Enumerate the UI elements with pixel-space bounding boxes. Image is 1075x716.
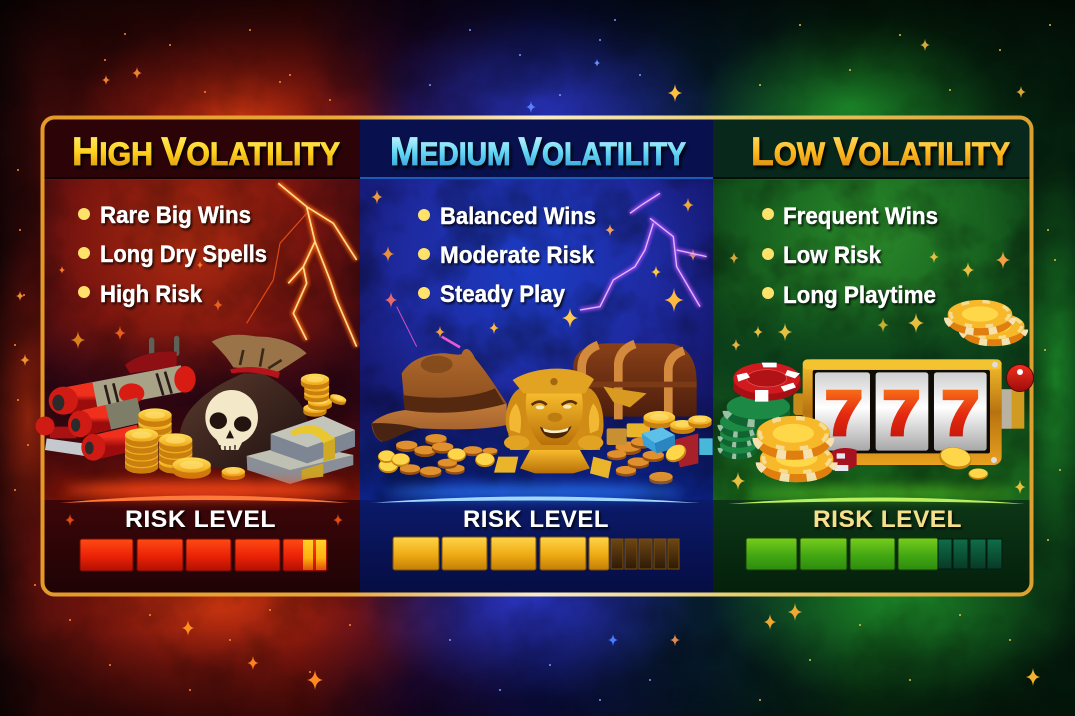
icon: stacked gold chips top right: [948, 300, 1024, 346]
icon: slot lever base: [1002, 389, 1024, 429]
heading: medium volatility: MEDIUM VOLATILITY: [390, 130, 686, 174]
list: low volatility traits: [762, 203, 938, 309]
label: risk level, medium: RISK LEVEL: [463, 506, 609, 533]
panel: medium volatility: [360, 118, 713, 594]
list: high volatility traits: [78, 202, 267, 308]
list: medium volatility traits: Balanced Wins: [440, 203, 596, 230]
icon: golden idol: [504, 369, 604, 473]
panel: high volatility: [43, 118, 360, 594]
icon: banknote bundles: [247, 416, 355, 484]
arc glow divider, medium panel: [370, 485, 700, 503]
list: high volatility traits: Rare Big Wins: [100, 202, 251, 229]
icon: treasure chest: [573, 343, 697, 420]
infographic frame with three panels: [43, 118, 1031, 594]
icon: slot machine with sevens: 7: [942, 379, 979, 449]
icon: gold coin stacks: [125, 374, 347, 480]
list: high volatility traits: High Risk: [100, 281, 203, 308]
icon: slot machine with sevens: [793, 359, 1002, 465]
heading: high volatility: HIGH VOLATILITY: [72, 130, 340, 174]
arc glow divider, high panel: [60, 481, 350, 503]
list: low volatility traits: Long Playtime: [783, 282, 936, 309]
lightning bolt, high panel: [247, 183, 357, 347]
list: medium volatility traits: Steady Play: [440, 281, 566, 308]
risk meter: high: [80, 539, 327, 571]
illustration: dynamite, skull money bag, coins and cash: [45, 335, 355, 484]
gold frame and dividers: [42, 118, 1032, 594]
arc glow divider, low panel: [728, 487, 1025, 504]
heading: low volatility: LOW VOLATILITY: [751, 130, 1010, 174]
list: low volatility traits: Frequent Wins: [783, 203, 938, 230]
list: low volatility traits: Low Risk: [783, 242, 882, 269]
icon: slot machine with sevens: 7: [825, 379, 863, 449]
panel: low volatility: [713, 118, 1031, 594]
list: high volatility traits: Long Dry Spells: [100, 241, 267, 268]
label: risk level, low: RISK LEVEL: [813, 506, 962, 533]
icon: slot machine with sevens: 7: [883, 379, 920, 449]
icon: slot lever knob overlapping frame: [1006, 364, 1034, 392]
list: medium volatility traits: [418, 203, 596, 308]
icon: poker chips: [720, 363, 988, 482]
lightning bolt, medium panel: [397, 193, 707, 347]
list: medium volatility traits: Moderate Risk: [440, 242, 595, 269]
risk meter: low: [746, 538, 1002, 570]
icon: explorer hat: [372, 349, 507, 442]
illustration: slot machine with poker chips: [720, 300, 1024, 482]
illustration: explorer hat, golden idol, treasure chest, coins: [372, 343, 713, 484]
label: risk level, high: RISK LEVEL: [125, 506, 276, 533]
icon: coin pile: [378, 411, 713, 484]
icon: dynamite end overlapping frame: [36, 416, 54, 436]
icon: skull money bag: [180, 335, 308, 470]
icon: dynamite bundle: [45, 338, 196, 461]
risk meter: medium: [393, 537, 679, 570]
